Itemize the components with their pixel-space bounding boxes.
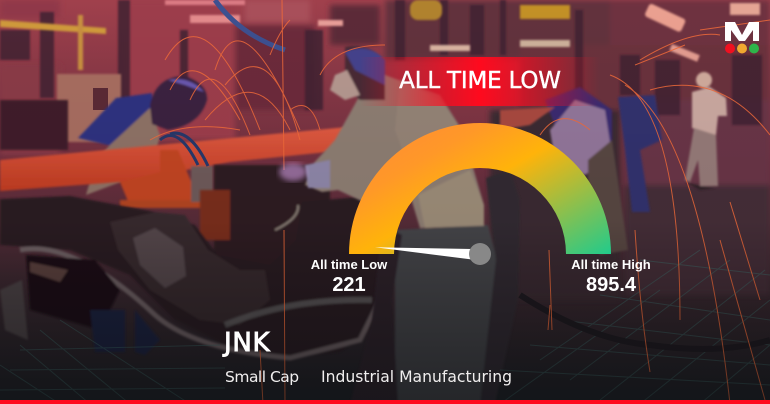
welding arc glow [279,163,307,181]
market cap: Small Cap [225,368,299,386]
car body frame [0,165,392,358]
logo [725,22,759,54]
grey cabinet behind workers [57,74,121,142]
hydraulic hoses [160,133,208,166]
gauge arc [349,123,611,254]
heading: all time low: ALL TIME LOW [399,68,561,94]
label: all time low value: 221 [332,274,366,296]
label: all time low value: All time Low [311,257,387,272]
blue-sleeved welder with helmet [78,76,207,195]
label: all time high value: 895.4 [586,274,636,296]
bottom red bar [0,400,770,404]
banner: all time low [366,57,595,106]
label: all time high value [571,257,651,296]
gauge needle [375,243,491,265]
label: all time high value: All time High [571,257,651,272]
centre welder [305,46,520,404]
factory ceiling structure [0,0,762,125]
background worker in light shirt [685,72,727,190]
industry: Industrial Manufacturing [321,368,512,386]
factory ceiling lights and yellow rails [0,0,760,70]
floor grating [0,250,770,404]
stock ticker: JNK [224,328,270,358]
label: all time low value [311,257,388,296]
right side welder [500,87,662,255]
orange steel beam [0,127,347,208]
